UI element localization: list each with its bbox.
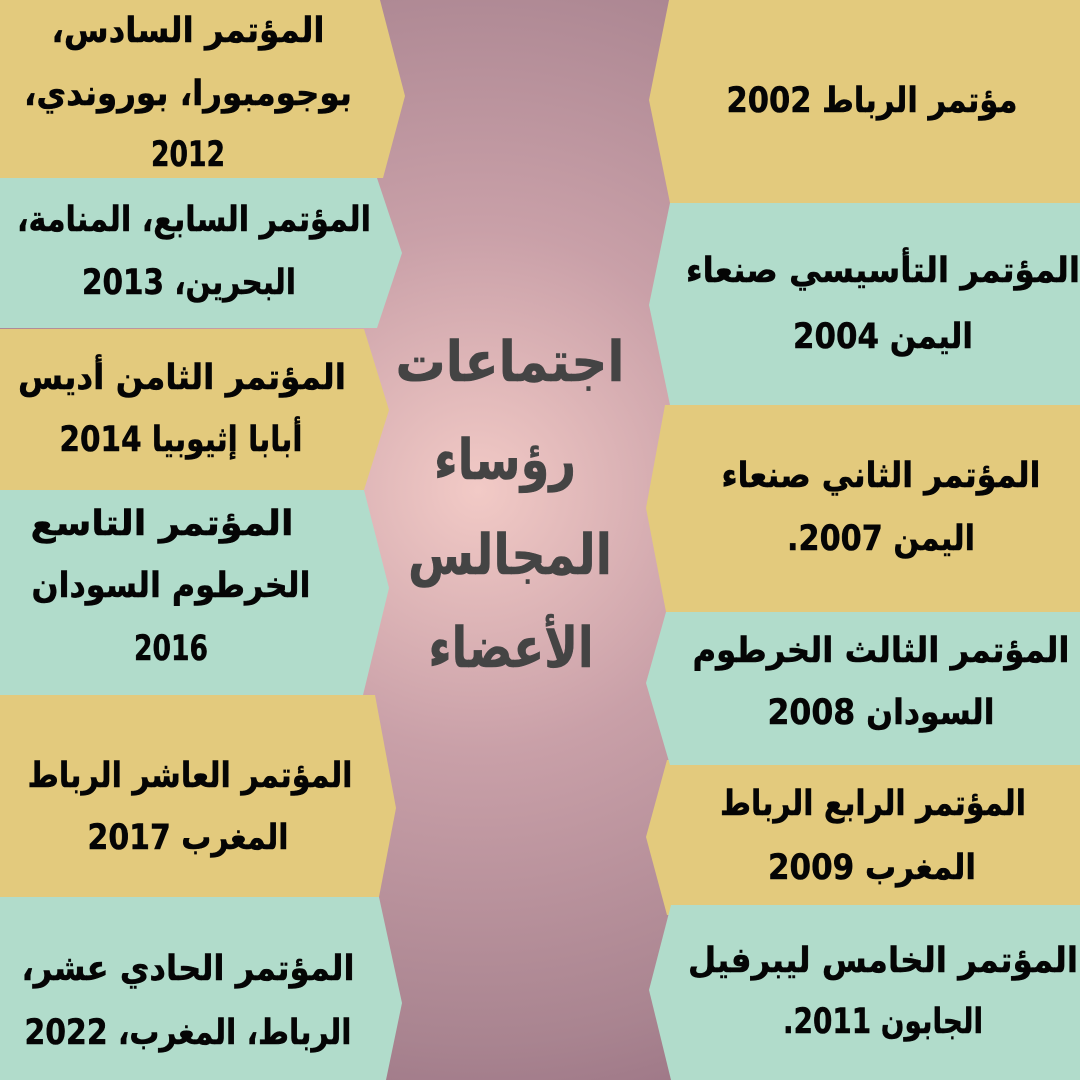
title: المجالس [408, 523, 612, 588]
panel: Rabat conference 2002: مؤتمر الرباط 2002 [726, 81, 1018, 121]
panel: second conference: المؤتمر الثاني صنعاء [722, 456, 1040, 496]
panel: ninth conference: المؤتمر التاسع [30, 504, 294, 544]
panel: fourth conference: المغرب 2009 [768, 848, 976, 888]
panel: fifth conference: الجابون 2011. [783, 1002, 983, 1042]
panel: seventh conference [0, 178, 402, 328]
panel: fourth conference [646, 760, 1080, 915]
panel: eleventh conference [0, 897, 402, 1080]
panel: tenth conference [0, 695, 396, 897]
panel: eleventh conference: المؤتمر الحادي عشر، [22, 949, 354, 989]
panel: eighth conference [0, 329, 389, 490]
panel: ninth conference [0, 490, 389, 695]
panel: third conference: السودان 2008 [768, 693, 994, 733]
panel: tenth conference: المغرب 2017 [87, 818, 288, 858]
panel: Rabat conference 2002 [649, 0, 1080, 203]
title [396, 330, 624, 681]
panel: sixth conference [0, 0, 405, 178]
panel: sixth conference: 2012 [151, 135, 225, 175]
panel: sixth conference: بوجومبورا، بوروندي، [24, 74, 352, 114]
panel: eighth conference: أبابا إثيوبيا 2014 [59, 416, 302, 460]
title: اجتماعات [396, 330, 624, 395]
panel: second conference [646, 405, 1080, 612]
panel: ninth conference: 2016 [134, 629, 208, 669]
panel: seventh conference: البحرين، 2013 [82, 263, 296, 303]
panel: founding conference [649, 203, 1080, 405]
panel: sixth conference: المؤتمر السادس، [52, 11, 324, 51]
title: رؤساء [434, 428, 576, 493]
panel: ninth conference: الخرطوم السودان [32, 566, 310, 606]
panel: fifth conference [649, 905, 1080, 1080]
panel: second conference: اليمن 2007. [787, 519, 975, 559]
panel: eighth conference: المؤتمر الثامن أديس [18, 354, 346, 398]
panel: third conference [646, 612, 1080, 765]
title: الأعضاء [428, 613, 594, 681]
panel: fourth conference: المؤتمر الرابع الرباط [720, 784, 1026, 824]
panel: tenth conference: المؤتمر العاشر الرباط [28, 756, 352, 796]
panel: founding conference: اليمن 2004 [793, 317, 973, 357]
panel: eleventh conference: الرباط، المغرب، 2022 [24, 1013, 352, 1053]
panel: seventh conference: المؤتمر السابع، المنامة، [17, 200, 371, 240]
